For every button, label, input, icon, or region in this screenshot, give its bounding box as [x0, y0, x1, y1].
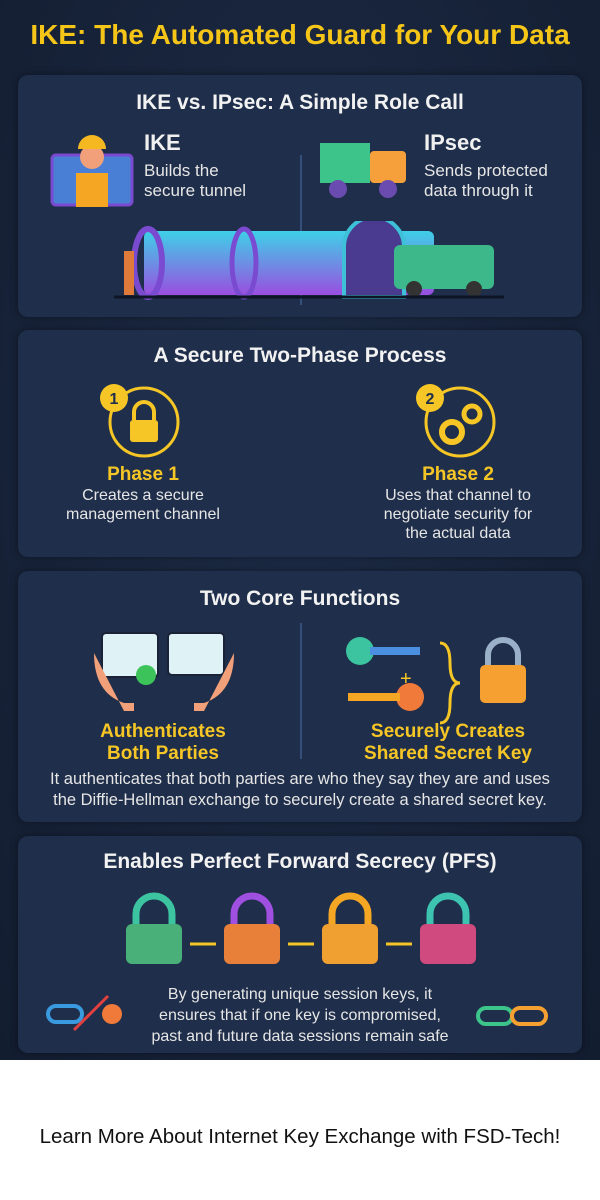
- icon: chain: [476, 1006, 548, 1026]
- text: PFS description: ensures that if one key is compromised,: [159, 1007, 441, 1024]
- text: authenticates: Authenticates: [100, 721, 226, 742]
- icon: broken chain: [46, 995, 122, 1031]
- text: shared key: Shared Secret Key: [364, 743, 532, 764]
- icon: phase 1 lock: [100, 384, 180, 458]
- text: PFS description: By generating unique session keys, it: [168, 986, 432, 1003]
- text: shared key: [364, 721, 532, 764]
- text: IKE: IKE: [144, 130, 181, 155]
- text: authenticates: [100, 721, 226, 764]
- panel: PFS: [18, 836, 582, 1053]
- icon: truck: [320, 143, 406, 198]
- icon: lock chain: [126, 892, 476, 964]
- panel: two-phase process: [18, 330, 582, 557]
- icon: id cards with hands: [94, 632, 234, 711]
- panel: two-phase process: Creates a secure: [82, 487, 204, 504]
- panel: two-phase process: the actual data: [406, 525, 510, 542]
- panel: IKE vs IPsec: Sends protected: [424, 161, 548, 180]
- icon: phase 1 lock: 1: [110, 391, 119, 408]
- text: PFS description: past and future data sessions remain safe: [151, 1028, 449, 1045]
- icon: phase 2 gears: [416, 384, 496, 458]
- icon: keys to lock: +: [400, 668, 412, 690]
- text: phase 1: Phase 1: [107, 464, 179, 485]
- text: shared key: Securely Creates: [371, 721, 525, 742]
- text: phase 2: Phase 2: [422, 464, 494, 485]
- panel: two core functions: [18, 571, 582, 822]
- icon: phase 2 gears: 2: [426, 391, 435, 408]
- panel: IKE vs IPsec: secure tunnel: [144, 181, 246, 200]
- text: description: [50, 770, 550, 809]
- panel: two-phase process: Uses that channel to: [385, 487, 531, 504]
- footer text: Learn More About Internet Key Exchange with FSD-Tech!: [40, 1125, 560, 1148]
- panel: IKE vs IPsec: data through it: [424, 181, 533, 200]
- panel: IKE vs IPsec: [18, 75, 582, 317]
- illustration: tunnel: [114, 221, 504, 300]
- panel: IKE vs IPsec: Builds the: [144, 161, 219, 180]
- text: authenticates: Both Parties: [107, 743, 219, 764]
- text: IPsec: IPsec: [424, 130, 482, 155]
- text: description: the Diffie-Hellman exchange to securely create a shared secret key.: [53, 791, 547, 809]
- title: IKE: The Automated Guard for Your Data: [30, 19, 570, 50]
- panel: two-phase process: negotiate security for: [384, 506, 532, 523]
- panel: two-phase process: management channel: [66, 506, 220, 523]
- heading: A Secure Two-Phase Process: [154, 344, 446, 367]
- heading: IKE vs. IPsec: A Simple Role Call: [136, 91, 464, 114]
- heading: Two Core Functions: [200, 587, 400, 610]
- icon: worker: [50, 135, 134, 207]
- text: PFS description: [151, 986, 449, 1045]
- text: description: It authenticates that both parties are who they say they are and uses: [50, 770, 550, 788]
- icon: keys to lock: [346, 637, 526, 724]
- heading: Enables Perfect Forward Secrecy (PFS): [103, 850, 497, 873]
